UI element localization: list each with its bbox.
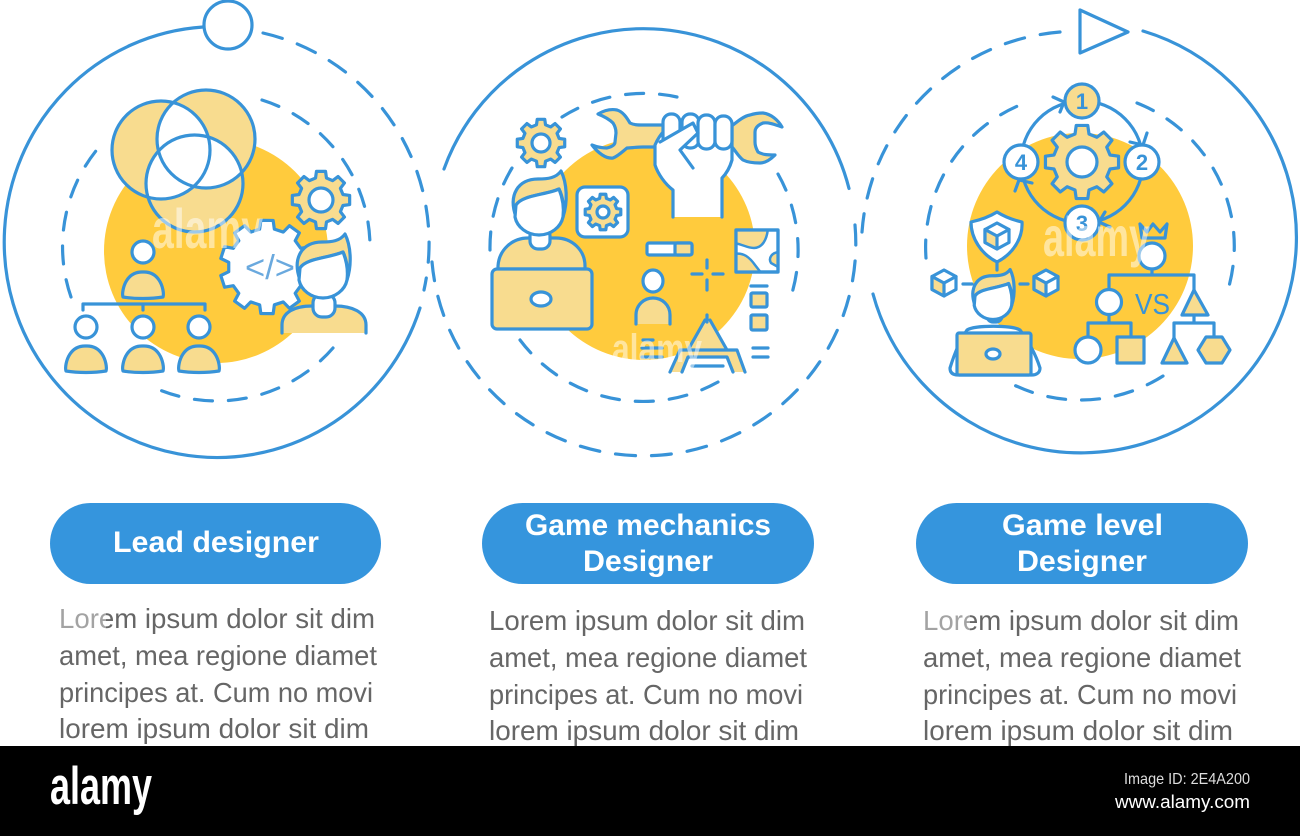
icon: small gear — [517, 119, 565, 167]
heading pill: game level designer: Designer — [1017, 545, 1147, 578]
ring marker triangle — [1080, 10, 1128, 53]
outer dashed ring — [432, 225, 856, 456]
heading pill: game level designer: Game level — [1002, 509, 1163, 542]
heading pill: lead designer: Lead designer — [113, 526, 319, 559]
inner dashed ring — [926, 103, 1234, 400]
panel: lead designer — [4, 1, 429, 458]
footer image id: Image ID: 2E4A200 — [1124, 771, 1250, 788]
icon: side cubes — [932, 270, 1058, 296]
icon: text lines — [642, 340, 662, 357]
ring marker circle — [204, 1, 252, 49]
text block: game mechanics designer: lorem ipsum dolor sit dim — [489, 715, 799, 746]
inner dashed ring — [490, 93, 798, 401]
text block: lead designer: principes at. Cum no movi — [59, 677, 373, 708]
icon: designer person — [282, 234, 366, 333]
text block: game mechanics designer: amet, mea regione diamet — [489, 642, 807, 673]
text block: game level designer — [922, 605, 1241, 746]
heading pill: game mechanics designer — [482, 503, 814, 584]
icon: wrench in fist — [592, 110, 782, 217]
icon: inventory squares — [751, 286, 768, 357]
icon: four step cycle: 4 — [1015, 150, 1028, 175]
icon: small person — [636, 270, 670, 324]
text block: lead designer — [58, 603, 377, 744]
watermark: alamy — [152, 197, 263, 260]
text block: game level designer: Lorem ipsum dolor sit dim — [923, 605, 1239, 636]
footer band — [0, 746, 1300, 836]
icon: code gear — [208, 209, 326, 325]
heading pill: lead designer — [50, 503, 381, 584]
icon: designer at laptop — [950, 270, 1040, 375]
yellow backdrop circle — [533, 138, 755, 360]
outer solid ring — [444, 29, 849, 189]
text block: game level designer: principes at. Cum no movi — [923, 679, 1237, 710]
inner dashed ring — [63, 100, 370, 401]
icon: shield with cube — [971, 212, 1022, 270]
icon: versus tournament tree — [1075, 224, 1230, 363]
icon: code gear: </> — [245, 249, 295, 287]
icon: slider bar — [647, 243, 692, 255]
footer logo: alamy — [50, 757, 152, 816]
text block: game mechanics designer — [489, 605, 807, 746]
icon: designer with laptop — [492, 171, 592, 329]
text block: lead designer: amet, mea regione diamet — [59, 640, 377, 671]
icon: settings tile — [577, 187, 628, 237]
outer dashed ring — [263, 33, 429, 290]
outer solid ring — [873, 31, 1296, 453]
yellow backdrop circle — [104, 139, 328, 363]
icon: team hierarchy — [66, 241, 219, 372]
heading pill: game level designer — [916, 503, 1248, 584]
text block: game level designer: lorem ipsum dolor sit dim — [923, 715, 1233, 746]
icon: small gear — [292, 171, 350, 229]
icon: versus tournament tree: VS — [1135, 289, 1170, 321]
icon: four step cycle: 2 — [1136, 150, 1148, 175]
icon: racing road — [670, 315, 745, 372]
watermark: alamy — [612, 327, 703, 371]
icon: map — [734, 228, 780, 274]
icon: crosshair — [692, 260, 723, 290]
text block: lead designer: Lorem ipsum dolor sit dim — [59, 603, 375, 634]
watermark: alamy — [1043, 205, 1150, 268]
heading pill: game mechanics designer: Designer — [583, 545, 713, 578]
text block: game level designer: amet, mea regione diamet — [923, 642, 1241, 673]
text block: lead designer: lorem ipsum dolor sit dim — [59, 713, 369, 744]
icon: four step cycle — [1004, 84, 1159, 240]
icon: venn diagram — [112, 90, 255, 232]
icon: four step cycle: 1 — [1076, 89, 1088, 114]
text block: game mechanics designer: Lorem ipsum dolor sit dim — [489, 605, 805, 636]
text block: game mechanics designer: principes at. Cum no movi — [489, 679, 803, 710]
outer dashed ring — [862, 32, 1060, 232]
icon: four step cycle: 3 — [1076, 211, 1088, 236]
yellow backdrop circle — [967, 133, 1193, 359]
footer website: www.alamy.com — [1114, 792, 1250, 812]
outer solid ring — [4, 27, 420, 458]
heading pill: game mechanics designer: Game mechanics — [525, 509, 771, 542]
panel: game mechanics designer — [432, 29, 856, 456]
panel: game level designer — [862, 10, 1296, 453]
